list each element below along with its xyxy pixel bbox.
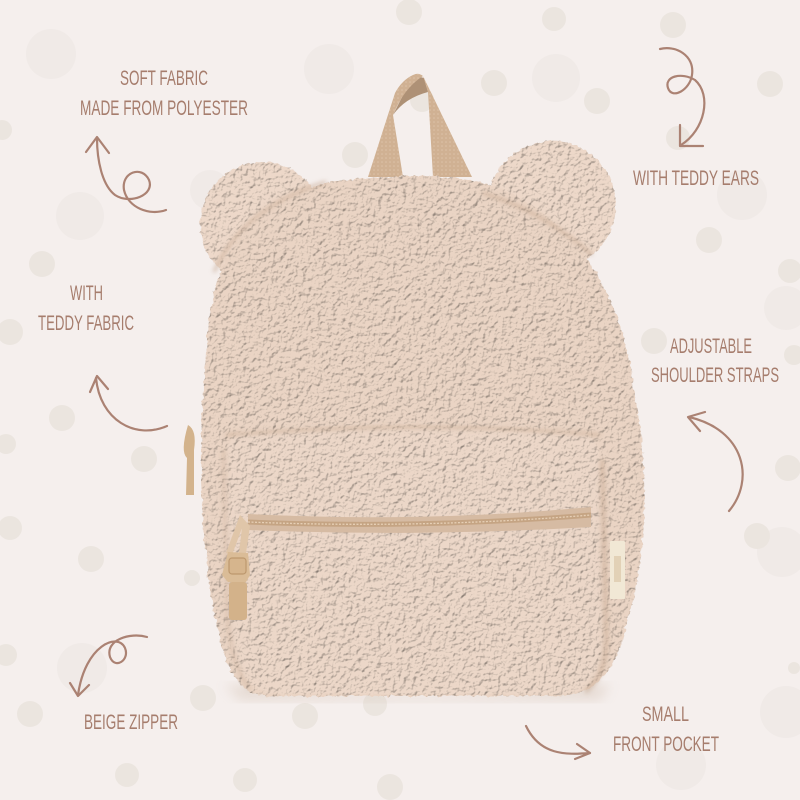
pocket and ear shading: [214, 182, 606, 692]
label: beige zipper: BEIGE ZIPPER: [84, 711, 178, 734]
label: adjustable straps: ADJUSTABLE: [670, 335, 752, 358]
arrow: soft fabric: [86, 137, 166, 212]
label: soft fabric: [80, 67, 248, 120]
backpack shadow: [225, 684, 610, 700]
top handle: [368, 74, 472, 177]
label: small front pocket: FRONT POCKET: [613, 733, 719, 756]
arrow: beige zipper: [70, 636, 147, 696]
arrow: adjustable straps: [688, 412, 743, 511]
label: teddy fabric: TEDDY FABRIC: [38, 312, 134, 335]
fabric label: [610, 541, 625, 599]
zipper pull: [222, 515, 250, 620]
label: small front pocket: [613, 703, 719, 756]
arrow: teddy ears: [660, 48, 704, 146]
arrow: small front pocket: [526, 726, 590, 759]
teddy fabric body and ears: [200, 141, 644, 696]
left ear: [200, 162, 324, 286]
front pocket: [224, 422, 606, 694]
main body: [201, 176, 644, 696]
label: small front pocket: SMALL: [642, 703, 689, 726]
label: teddy fabric: [38, 282, 134, 335]
label: soft fabric: MADE FROM POLYESTER: [80, 97, 248, 120]
label: teddy fabric: WITH: [70, 282, 103, 305]
right ear: [488, 141, 616, 269]
front zipper: [248, 507, 591, 533]
label: soft fabric: SOFT FABRIC: [120, 67, 208, 90]
arrow: teddy fabric: [90, 376, 167, 430]
backpack: [184, 74, 644, 700]
side zipper pull: [184, 425, 195, 495]
label: adjustable straps: [651, 335, 779, 387]
